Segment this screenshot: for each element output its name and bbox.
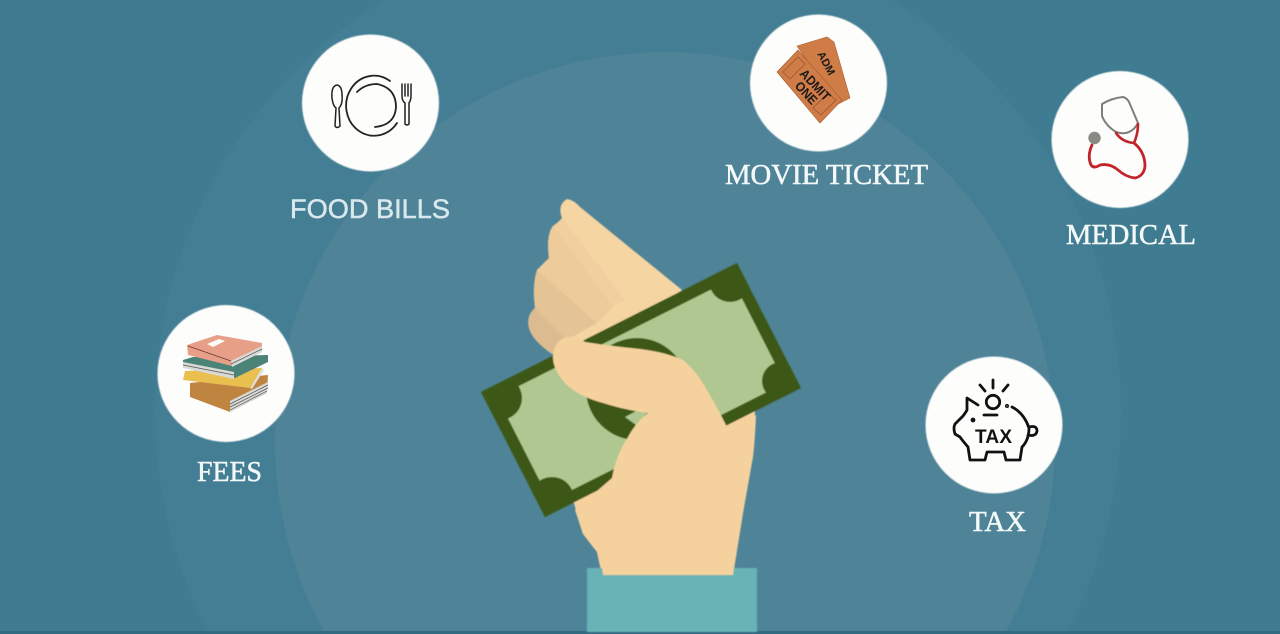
label: movie ticket: MOVIE TICKET: [725, 159, 928, 191]
icon: admit one tickets: [777, 37, 850, 123]
movie ticket item: [725, 14, 928, 191]
icon: admit one tickets: ADMIT: [797, 66, 834, 104]
circle: fees: [158, 305, 294, 442]
fees item: [158, 305, 294, 488]
icon: stack of books: [183, 335, 268, 412]
label: medical: MEDICAL: [1066, 219, 1196, 251]
back fingers: [528, 199, 682, 354]
thumb and front of hand: [553, 337, 756, 575]
label: food bills: FOOD BILLS: [290, 194, 450, 224]
icon: admit one tickets: ONE: [792, 78, 821, 108]
icon: admit one tickets: ADM: [814, 50, 837, 77]
circle: tax: [926, 356, 1062, 494]
lower palm behind note: [573, 405, 755, 575]
circle: medical: [1052, 71, 1188, 208]
central illustration: hand holding banknote: [478, 199, 801, 632]
label: fees: FEES: [197, 456, 262, 488]
label: tax: TAX: [969, 506, 1026, 538]
tax item: [926, 356, 1062, 538]
cuff: [587, 568, 757, 632]
medical item: [1052, 71, 1196, 251]
food bills item: [290, 34, 450, 224]
icon: piggy bank: [954, 380, 1037, 460]
circle: ticket: [750, 14, 887, 152]
circle: food: [302, 34, 439, 172]
icon: stethoscope: [1088, 97, 1145, 178]
banknote: [478, 260, 801, 521]
icon: piggy bank: TAX: [975, 427, 1012, 448]
icon: plate and cutlery: [332, 76, 411, 136]
